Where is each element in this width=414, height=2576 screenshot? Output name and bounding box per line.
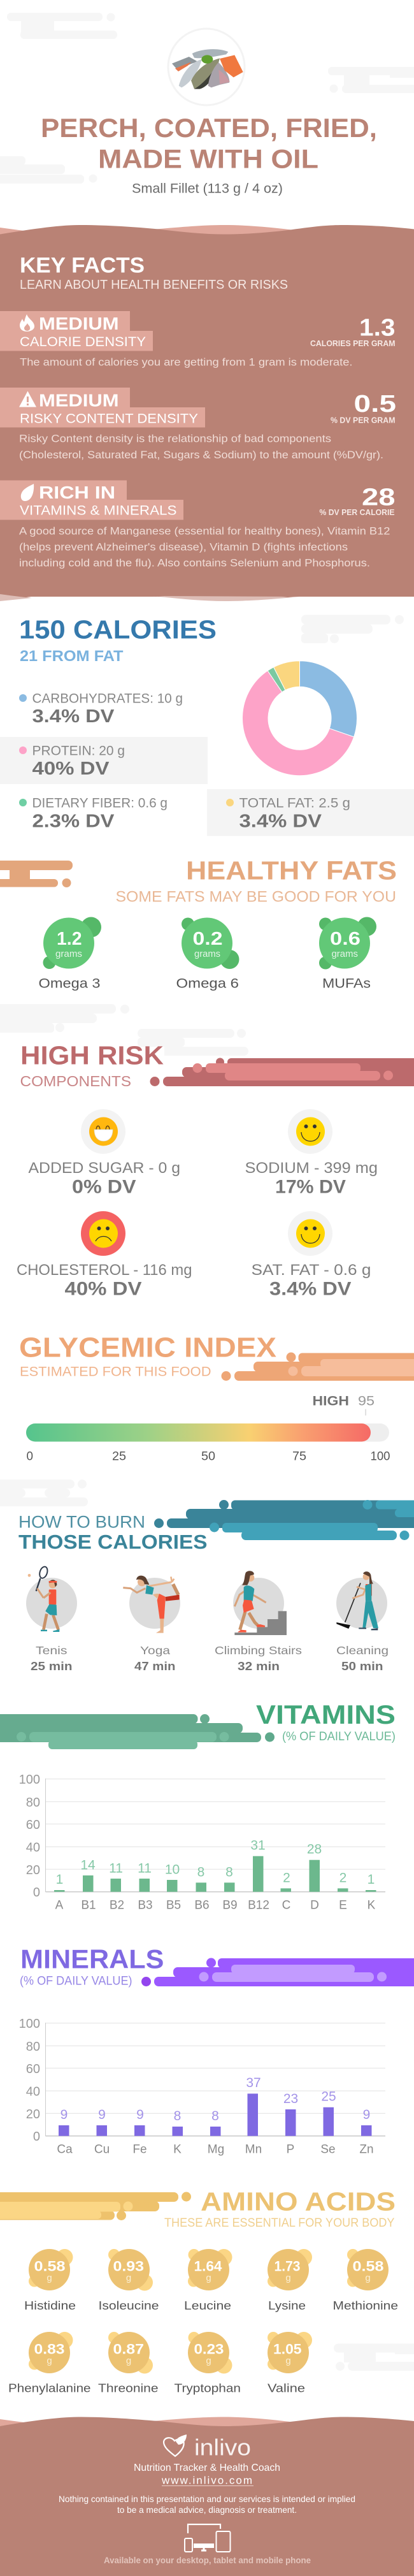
amino: lysine: Lysine xyxy=(268,2299,306,2312)
fact: vitamins and minerals: % DV PER CALORIE xyxy=(320,508,395,517)
icon: warning triangle xyxy=(19,391,36,407)
serving size: Small Fillet (113 g / 4 oz) xyxy=(132,181,283,196)
bar chart: vitamins: 14 xyxy=(80,1858,96,1873)
bar chart: minerals: Zn xyxy=(359,2143,374,2156)
section: vitamins xyxy=(0,1699,396,1912)
decorative banner xyxy=(154,1500,414,1540)
bar chart: vitamins: B12 xyxy=(248,1898,269,1912)
decorative banner xyxy=(222,1353,414,1381)
activity: tennis xyxy=(26,1566,77,1632)
heading: KEY FACTS xyxy=(20,254,145,278)
fact: calorie density: The amount of calories you are getting from 1 gram is moderate. xyxy=(20,356,353,368)
bar chart: vitamins: 8 xyxy=(225,1865,233,1879)
bar chart: vitamins: 0 xyxy=(33,1886,40,1900)
amino: threonine xyxy=(98,2332,158,2394)
gauge value: HIGH xyxy=(312,1394,349,1409)
activity: cleaning xyxy=(336,1571,387,1630)
gauge bar xyxy=(26,1423,389,1442)
heading: HEALTHY FATS xyxy=(186,855,397,885)
donut chart xyxy=(242,661,357,776)
bar chart: vitamins: B6 xyxy=(194,1898,210,1912)
logo xyxy=(164,2434,251,2461)
bar chart: minerals: Mn xyxy=(245,2143,262,2156)
legend: dietary fiber: DIETARY FIBER: 0.6 g xyxy=(32,796,168,811)
amino: methionine: 0.58 xyxy=(353,2258,383,2274)
tagline and url: www.inlivo.com xyxy=(161,2475,252,2486)
disclaimer xyxy=(59,2494,355,2515)
fact: vitamins and minerals: 28 xyxy=(362,484,395,511)
bar chart: vitamins: 8 xyxy=(197,1865,204,1879)
section: glycemic index: ESTIMATED FOR THIS FOOD xyxy=(20,1364,211,1379)
legend: dietary fiber: 2.3% DV xyxy=(32,811,115,831)
amino: leucine xyxy=(184,2249,232,2312)
bar chart: vitamins: 31 xyxy=(250,1838,266,1852)
bar chart: vitamins: 10 xyxy=(165,1863,180,1877)
bar chart: minerals: 0 xyxy=(33,2130,40,2144)
amino: valine: Valine xyxy=(268,2382,305,2394)
title: PERCH, COATED, FRIED, xyxy=(41,113,377,143)
item: added sugar xyxy=(28,1109,180,1197)
amino: isoleucine: 0.93 xyxy=(113,2258,144,2274)
bar chart: vitamins: E xyxy=(339,1898,347,1912)
fact: vitamins and minerals xyxy=(0,481,395,569)
bar chart: vitamins: B9 xyxy=(222,1898,238,1912)
activity labels: 50 min xyxy=(341,1659,383,1673)
bar chart: minerals: 60 xyxy=(26,2062,40,2076)
amino: tryptophan: 0.23 xyxy=(194,2341,224,2357)
fact: risky content density: Risky Content density is the relationship of bad components xyxy=(19,432,331,445)
amino: isoleucine: g xyxy=(126,2273,131,2283)
bar chart: vitamins: B1 xyxy=(81,1898,96,1912)
activity labels: 47 min xyxy=(134,1659,176,1673)
badge: mufas: grams xyxy=(331,949,358,959)
bar chart: minerals: 9 xyxy=(136,2107,144,2122)
decorative banner xyxy=(0,2192,191,2220)
icon: flame xyxy=(20,314,34,331)
heading: MINERALS xyxy=(20,1944,164,1974)
item: saturated fat xyxy=(251,1211,371,1299)
activity labels xyxy=(31,1644,389,1673)
legend: total fat: TOTAL FAT: 2.5 g xyxy=(239,796,350,811)
activity labels: Climbing Stairs xyxy=(215,1644,302,1657)
heading: GLYCEMIC INDEX xyxy=(19,1332,276,1363)
bar chart: vitamins: 11 xyxy=(109,1861,123,1875)
bar chart: vitamins: 80 xyxy=(26,1796,40,1810)
section: glycemic index xyxy=(19,1332,414,1464)
bar chart: minerals: P xyxy=(287,2143,294,2156)
title xyxy=(41,113,377,173)
bar chart: vitamins: 1 xyxy=(56,1872,63,1887)
header: title and food image xyxy=(0,13,414,196)
bar chart: minerals: 8 xyxy=(211,2109,219,2123)
fact: risky content density xyxy=(0,388,396,461)
amino: methionine xyxy=(332,2249,398,2312)
activity: climbing stairs xyxy=(233,1571,287,1635)
bar chart: minerals: 23 xyxy=(283,2092,298,2106)
bar chart: vitamins: B3 xyxy=(138,1898,153,1912)
bar chart: minerals: Mg xyxy=(208,2143,224,2156)
fact: vitamins and minerals: (helps prevent Alzheimer's disease), Vitamin D (fights infections xyxy=(19,541,348,553)
amino: phenylalanine: 0.83 xyxy=(34,2341,65,2357)
bar chart: minerals: 9 xyxy=(98,2107,106,2122)
gauge value: 95 xyxy=(358,1394,375,1409)
amino: lysine xyxy=(268,2249,312,2312)
section: how to burn those calories xyxy=(0,1480,414,1673)
badge: omega 6: grams xyxy=(194,949,220,959)
amino: histidine: g xyxy=(46,2273,52,2283)
amino: lysine: g xyxy=(285,2273,291,2283)
heading: VITAMINS xyxy=(256,1699,396,1729)
icon: leaf xyxy=(21,484,34,501)
amino: valine: g xyxy=(285,2355,291,2366)
amino: phenylalanine xyxy=(8,2332,90,2394)
amino: isoleucine xyxy=(98,2249,159,2312)
bar chart: vitamins: 28 xyxy=(307,1842,322,1856)
heading: AMINO ACIDS xyxy=(201,2187,396,2216)
legend: protein xyxy=(0,737,208,784)
amino: threonine: 0.87 xyxy=(113,2341,144,2357)
title: MADE WITH OIL xyxy=(98,144,318,173)
activity labels: Tenis xyxy=(36,1644,68,1657)
heading: 150 CALORIES xyxy=(19,615,217,644)
amino: threonine: g xyxy=(126,2355,131,2366)
legend: protein: 40% DV xyxy=(32,759,110,779)
activity labels: Cleaning xyxy=(336,1644,389,1657)
amino: leucine: Leucine xyxy=(184,2299,231,2312)
decorative banner xyxy=(141,1958,414,1986)
badge: omega 6 xyxy=(176,918,239,991)
bar chart: vitamins: 40 xyxy=(26,1841,40,1855)
amino: valine: 1.05 xyxy=(273,2341,302,2357)
bar chart: vitamins: D xyxy=(310,1898,319,1912)
item: sodium xyxy=(245,1109,378,1197)
section: calories xyxy=(0,615,414,836)
fact: vitamins and minerals: including cold and the flu). Also contains Selenium and Phosphorus. xyxy=(19,557,370,569)
gauge value xyxy=(312,1394,375,1415)
item: added sugar: 0% DV xyxy=(72,1177,136,1197)
amino: methionine: Methionine xyxy=(332,2299,398,2312)
activity labels: 25 min xyxy=(31,1659,73,1673)
section: minerals xyxy=(19,1944,414,2156)
decorative banner xyxy=(0,1714,275,1749)
badge: omega 3: grams xyxy=(55,949,82,959)
badge: omega 6: 0.2 xyxy=(192,929,223,949)
section: high risk components: COMPONENTS xyxy=(20,1073,131,1089)
item: saturated fat: SAT. FAT - 0.6 g xyxy=(251,1262,371,1279)
heading: HOW TO BURN xyxy=(18,1512,145,1531)
bar chart: minerals: 20 xyxy=(26,2107,40,2121)
fact: risky content density: 0.5 xyxy=(354,391,396,418)
legend: carbohydrates xyxy=(19,691,183,727)
gauge scale: 50 xyxy=(201,1450,215,1464)
bar chart: vitamins: K xyxy=(368,1898,376,1912)
bar chart: minerals: 80 xyxy=(26,2040,40,2054)
section: how to burn those calories: THOSE CALORIES xyxy=(18,1530,208,1553)
bar chart: minerals: 37 xyxy=(246,2076,261,2090)
bar chart: minerals: 8 xyxy=(174,2109,181,2123)
bar chart: vitamins: 100 xyxy=(19,1773,40,1787)
bar chart: minerals: K xyxy=(173,2143,182,2156)
fact: calorie density: CALORIES PER GRAM xyxy=(310,339,395,348)
bar chart: vitamins: B2 xyxy=(110,1898,124,1912)
section: amino acids xyxy=(0,2187,414,2394)
badge: mufas: MUFAs xyxy=(322,975,371,991)
panel: key facts xyxy=(0,225,414,601)
gauge scale: 0 xyxy=(27,1450,33,1464)
bar chart: minerals: Se xyxy=(320,2143,336,2156)
section: minerals: (% OF DAILY VALUE) xyxy=(20,1975,132,1988)
bar chart: vitamins: 2 xyxy=(283,1870,290,1886)
fact: calorie density: MEDIUM xyxy=(39,314,118,333)
bar chart: minerals: Cu xyxy=(94,2143,110,2156)
amino: tryptophan xyxy=(175,2332,241,2394)
fact: risky content density: RISKY CONTENT DENSITY xyxy=(20,411,198,426)
fact: risky content density: MEDIUM xyxy=(39,390,118,411)
decorative banner xyxy=(150,1058,414,1086)
activity labels: Yoga xyxy=(140,1644,170,1657)
item: sodium: SODIUM - 399 mg xyxy=(245,1160,378,1177)
amino: histidine: Histidine xyxy=(24,2299,76,2312)
disclaimer: to be a medical advice, diagnosis or treatment. xyxy=(117,2505,297,2515)
tagline and url: Nutrition Tracker & Health Coach xyxy=(134,2463,280,2473)
bar chart: minerals: 100 xyxy=(19,2017,40,2031)
badge: mufas xyxy=(319,917,376,991)
amino: leucine: 1.64 xyxy=(194,2258,222,2274)
badge: omega 3: Omega 3 xyxy=(38,975,101,991)
item: cholesterol xyxy=(17,1211,192,1299)
bar chart: minerals xyxy=(19,2017,385,2156)
section: healthy fats xyxy=(0,855,397,991)
fact: calorie density xyxy=(0,311,395,368)
heading: LEARN ABOUT HEALTH BENEFITS OR RISKS xyxy=(20,278,288,292)
item: added sugar: ADDED SUGAR - 0 g xyxy=(28,1160,180,1177)
section: calories: 21 FROM FAT xyxy=(20,648,124,665)
legend: protein: PROTEIN: 20 g xyxy=(32,743,125,759)
amino: tryptophan: g xyxy=(206,2355,211,2366)
item: cholesterol: 40% DV xyxy=(65,1279,141,1299)
bar chart: vitamins: B5 xyxy=(166,1898,181,1912)
legend: total fat: 3.4% DV xyxy=(239,811,322,831)
fact: calorie density: 1.3 xyxy=(359,315,395,342)
bar chart: vitamins: 2 xyxy=(339,1870,346,1886)
amino: valine xyxy=(268,2332,312,2394)
amino: lysine: 1.73 xyxy=(274,2258,301,2274)
panel: footer xyxy=(0,2417,414,2576)
item: saturated fat: 3.4% DV xyxy=(269,1279,352,1299)
bar chart: vitamins: 60 xyxy=(26,1818,40,1832)
bar chart: minerals: Ca xyxy=(57,2143,73,2156)
item: cholesterol: CHOLESTEROL - 116 mg xyxy=(17,1262,192,1279)
amino: histidine: 0.58 xyxy=(34,2258,65,2274)
bar chart: minerals: 40 xyxy=(26,2085,40,2099)
badge: omega 6: Omega 6 xyxy=(176,975,239,991)
gauge scale xyxy=(27,1450,390,1464)
bar chart: vitamins: 11 xyxy=(138,1861,152,1875)
fact: calorie density: CALORIE DENSITY xyxy=(20,334,146,349)
gauge scale: 75 xyxy=(292,1450,306,1464)
section: high risk components xyxy=(0,1004,414,1299)
icon: devices xyxy=(185,2524,231,2552)
amino: leucine: g xyxy=(206,2273,211,2283)
bar chart: vitamins: 1 xyxy=(368,1872,375,1887)
bar chart: minerals: 9 xyxy=(363,2107,370,2122)
heading xyxy=(20,254,288,292)
fact: vitamins and minerals: VITAMINS & MINERALS xyxy=(20,502,177,518)
fact: risky content density: (Cholesterol, Saturated Fat, Sugars & Sodium) to the amount (%DV/gr). xyxy=(19,449,383,461)
badge: omega 3: 1.2 xyxy=(57,929,82,949)
bar chart: vitamins: 20 xyxy=(26,1863,40,1877)
legend: total fat xyxy=(207,789,414,836)
bar chart: vitamins xyxy=(19,1773,385,1912)
bar chart: minerals: 9 xyxy=(61,2107,68,2122)
food image: fish in circle xyxy=(168,29,245,105)
fact: risky content density: % DV PER GRAM xyxy=(331,416,395,425)
bar chart: minerals: 25 xyxy=(321,2090,336,2104)
section: amino acids: THESE ARE ESSENTIAL FOR YOUR BODY xyxy=(164,2216,395,2230)
logo: inlivo xyxy=(194,2434,251,2461)
amino: phenylalanine: Phenylalanine xyxy=(8,2382,90,2394)
activity: yoga xyxy=(123,1576,180,1633)
disclaimer: Nothing contained in this presentation and our services is intended or implied xyxy=(59,2494,355,2504)
amino: tryptophan: Tryptophan xyxy=(175,2382,241,2394)
legend: carbohydrates: 3.4% DV xyxy=(32,706,115,727)
bar chart: vitamins: C xyxy=(282,1898,290,1912)
section: vitamins: (% OF DAILY VALUE) xyxy=(282,1730,396,1743)
heading: HIGH RISK xyxy=(20,1040,164,1070)
gauge scale: 100 xyxy=(371,1450,390,1464)
activity labels: 32 min xyxy=(238,1659,280,1673)
availability note: Available on your desktop, tablet and mobile phone xyxy=(104,2555,311,2565)
gauge scale: 25 xyxy=(112,1450,126,1464)
badge: mufas: 0.6 xyxy=(330,929,360,949)
section: healthy fats: SOME FATS MAY BE GOOD FOR YOU xyxy=(116,889,396,905)
fact: vitamins and minerals: A good source of Manganese (essential for healthy bones), Vitamin B12 xyxy=(19,525,390,537)
amino: methionine: g xyxy=(365,2273,371,2283)
tagline and url xyxy=(134,2463,280,2486)
item: sodium: 17% DV xyxy=(275,1177,346,1197)
fact: vitamins and minerals: RICH IN xyxy=(39,483,115,502)
legend: carbohydrates: CARBOHYDRATES: 10 g xyxy=(32,691,183,706)
amino: threonine: Threonine xyxy=(98,2382,158,2394)
legend: dietary fiber xyxy=(19,796,168,831)
bar chart: vitamins: A xyxy=(55,1898,64,1912)
badge: omega 3 xyxy=(38,917,101,991)
bar chart: minerals: Fe xyxy=(132,2143,147,2156)
amino: phenylalanine: g xyxy=(46,2355,52,2366)
amino: histidine xyxy=(24,2249,76,2312)
amino: isoleucine: Isoleucine xyxy=(98,2299,159,2312)
